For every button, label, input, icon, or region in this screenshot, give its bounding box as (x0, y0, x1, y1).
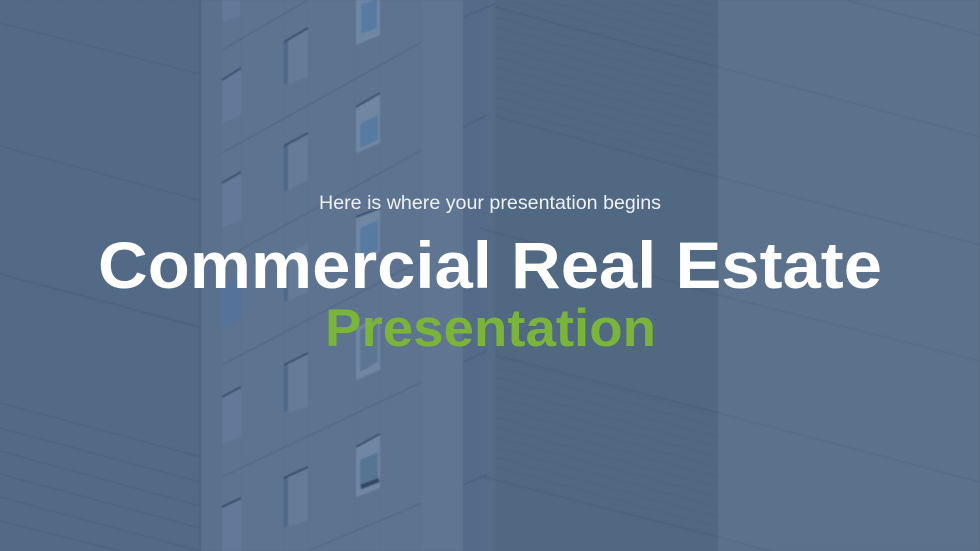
windows: column 2 dark reveals (284, 40, 288, 528)
subtitle: Here is where your presentation begins (319, 192, 661, 214)
windows: column 3 (356, 0, 380, 497)
windows: column 1 (222, 0, 241, 551)
left building face (0, 0, 207, 551)
central tower (201, 0, 500, 551)
windows: column 3 glass panes (360, 0, 378, 490)
windows: column 2 (284, 28, 308, 528)
right building faces (494, 0, 980, 550)
title: Commercial Real Estate (98, 228, 882, 302)
title accent: Presentation (325, 299, 656, 358)
window lintels (222, 28, 380, 507)
